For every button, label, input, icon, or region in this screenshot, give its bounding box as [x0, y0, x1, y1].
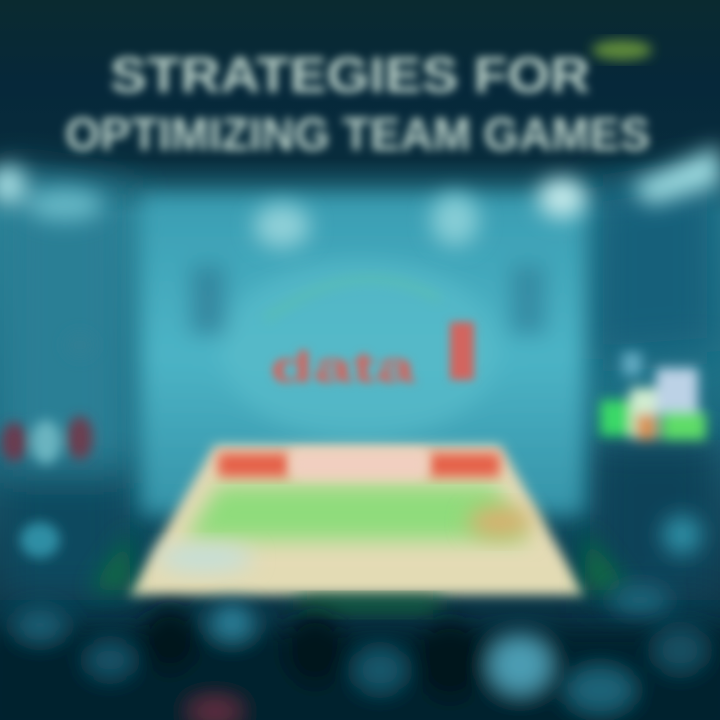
pale strip middle [290, 450, 428, 478]
red centre label [270, 322, 474, 392]
stadium lights [0, 145, 720, 248]
green arc detail [265, 279, 440, 320]
blue corner detail [157, 544, 253, 572]
left crowd flags [1, 331, 96, 558]
right crowd highlights [610, 515, 702, 616]
pitch green [185, 485, 530, 540]
pitch board [128, 445, 585, 595]
red centre label: data [270, 343, 416, 392]
red strip left [218, 453, 290, 477]
foreground crowd [0, 604, 720, 720]
red strip right [428, 453, 500, 477]
side stands [0, 170, 720, 600]
colourful chart cluster [600, 352, 706, 440]
orange corner detail [468, 506, 532, 538]
title: OPTIMIZING TEAM GAMES [65, 108, 650, 160]
central wall panel [140, 195, 585, 515]
title: STRATEGIES FOR [110, 47, 590, 103]
title [65, 47, 650, 160]
green glow under pitch [90, 530, 630, 590]
title accent [592, 40, 652, 60]
